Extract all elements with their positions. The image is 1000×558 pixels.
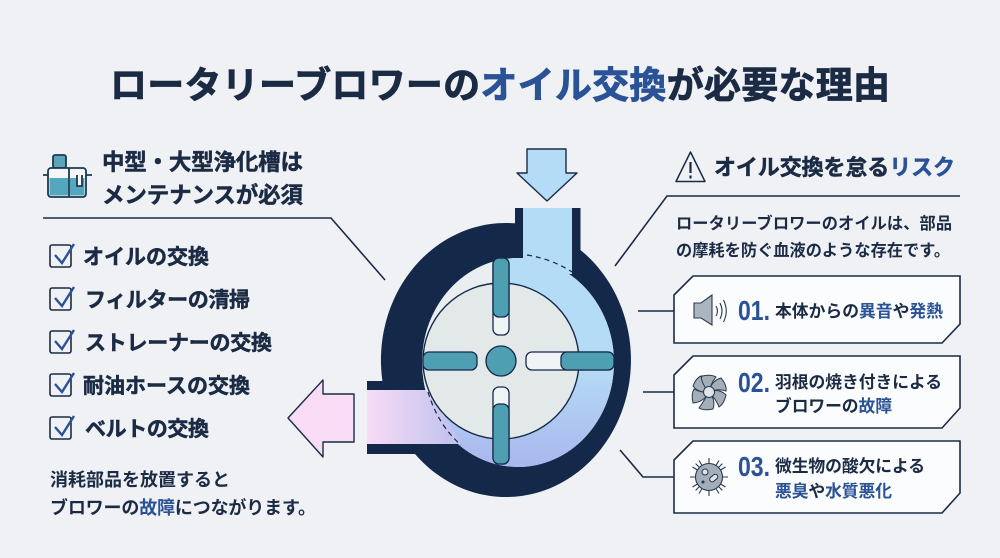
checkbox item: belt: ベルトの交換 <box>85 418 209 441</box>
blower casing <box>367 208 631 497</box>
card 02: ブロワーの故障 <box>775 397 892 416</box>
checkbox item: filter: フィルターの清掃 <box>85 289 250 312</box>
diagram: rotary blower <box>288 149 631 497</box>
card 03 <box>620 441 960 513</box>
checkbox item: hose: 耐油ホースの交換 <box>83 375 250 398</box>
icon: microbe <box>690 458 728 496</box>
rotor hub <box>486 346 516 376</box>
paragraph: の摩耗を防ぐ血液のような存在です。 <box>676 241 950 260</box>
checkbox item: oil: オイルの交換 <box>83 246 209 269</box>
panel: maintenance items <box>43 150 385 518</box>
card 02: 羽根の焼き付きによる <box>775 372 942 392</box>
card 01: 本体からの異音や発熱 <box>775 301 943 321</box>
icon: warning <box>676 152 705 182</box>
leader line left <box>43 218 385 280</box>
icon: speaker <box>694 295 726 325</box>
heading: septic tank maintenance: メンテナンスが必須 <box>102 182 303 208</box>
card 03: 微生物の酸欠による <box>775 456 925 476</box>
paragraph: ロータリーブロワーのオイルは、部品 <box>676 214 952 233</box>
icon: fan <box>692 375 726 410</box>
icon: septic tank <box>43 155 92 197</box>
card 01: 01. <box>738 295 770 326</box>
checklist <box>50 244 272 441</box>
vane bottom <box>493 387 509 464</box>
note text: ブロワーの故障につながります。 <box>50 498 316 518</box>
card 02 <box>643 356 960 428</box>
card 03: 03. <box>738 451 770 482</box>
card 01 <box>638 276 960 343</box>
vane top <box>493 258 509 335</box>
title: ロータリーブロワーのオイル交換が必要な理由 <box>110 64 890 106</box>
vane left <box>423 352 477 370</box>
card 03: 悪臭や水質悪化 <box>775 482 892 501</box>
outlet pipe air <box>367 390 462 444</box>
vane right <box>526 352 614 370</box>
air flow <box>444 258 614 467</box>
rotor <box>423 283 579 439</box>
dashed inlet boundary <box>527 255 572 272</box>
heading: risks: オイル交換を怠るリスク <box>714 155 955 180</box>
panel: risks <box>615 152 960 513</box>
arrow: air inlet <box>517 149 577 201</box>
dashed outlet boundary <box>428 392 461 445</box>
leader line right <box>615 196 960 266</box>
note text: 消耗部品を放置すると <box>50 470 230 490</box>
card 02: 02. <box>738 367 770 398</box>
heading: septic tank maintenance: 中型・大型浄化槽は <box>102 150 303 175</box>
blower cavity <box>422 258 614 467</box>
checkbox item: strainer: ストレーナーの交換 <box>85 332 272 355</box>
arrow: air outlet <box>288 380 354 457</box>
inlet pipe air <box>523 208 572 274</box>
